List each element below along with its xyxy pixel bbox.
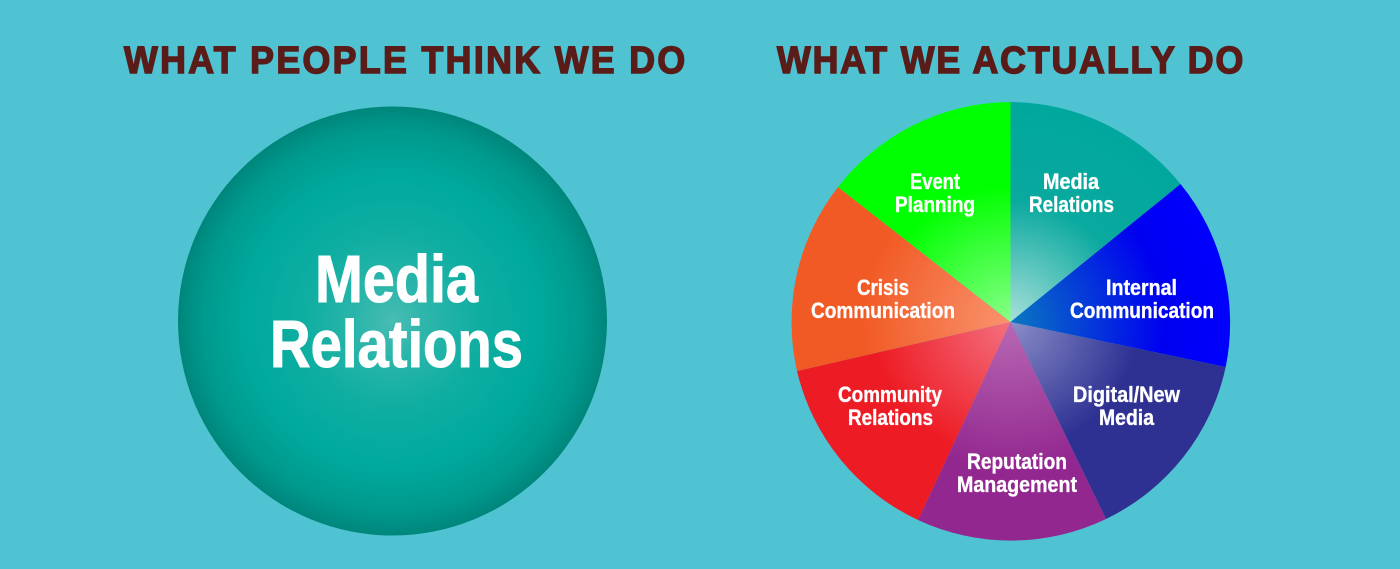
label: media relations: Relations <box>1029 192 1114 217</box>
label: crisis communication: Crisis <box>857 275 909 300</box>
slice: media relations <box>1010 102 1180 322</box>
circle label: Media <box>315 242 479 317</box>
label: reputation management <box>957 449 1078 497</box>
slice: internal communication <box>1010 184 1230 367</box>
label: event planning <box>895 169 975 217</box>
pie chart: what we actually do <box>792 102 1230 541</box>
circle <box>178 106 607 536</box>
slice: reputation management <box>918 322 1106 541</box>
slice: community relations <box>797 322 1010 520</box>
heading: what people think we do: WHAT PEOPLE THINK WE DO <box>124 39 685 81</box>
label: crisis communication: Communication <box>811 298 955 323</box>
label: community relations: Community <box>838 382 943 407</box>
label: crisis communication <box>811 275 955 323</box>
label: reputation management: Management <box>957 472 1078 497</box>
label: digital/new media: Digital/New <box>1073 382 1181 407</box>
label: media relations <box>1029 169 1114 217</box>
label: media relations: Media <box>1043 169 1100 194</box>
label: internal communication <box>1070 275 1214 323</box>
label: digital/new media: Media <box>1099 405 1155 430</box>
label: community relations <box>838 382 943 430</box>
slice: event planning <box>838 102 1010 322</box>
label: event planning: Planning <box>895 192 975 217</box>
slice labels <box>811 169 1214 497</box>
panel: single media relations circle <box>178 106 607 536</box>
label: reputation management: Reputation <box>967 449 1067 474</box>
label: internal communication: Internal <box>1106 275 1177 300</box>
slice: crisis communication <box>792 187 1010 371</box>
circle label: Relations <box>270 307 523 382</box>
label: event planning: Event <box>910 169 961 194</box>
label: community relations: Relations <box>848 405 933 430</box>
heading: what we actually do: WHAT WE ACTUALLY DO <box>777 39 1243 81</box>
circle label <box>270 242 523 382</box>
label: internal communication: Communication <box>1070 298 1214 323</box>
label: digital/new media <box>1073 382 1181 430</box>
slice: digital/new media <box>1010 322 1226 519</box>
